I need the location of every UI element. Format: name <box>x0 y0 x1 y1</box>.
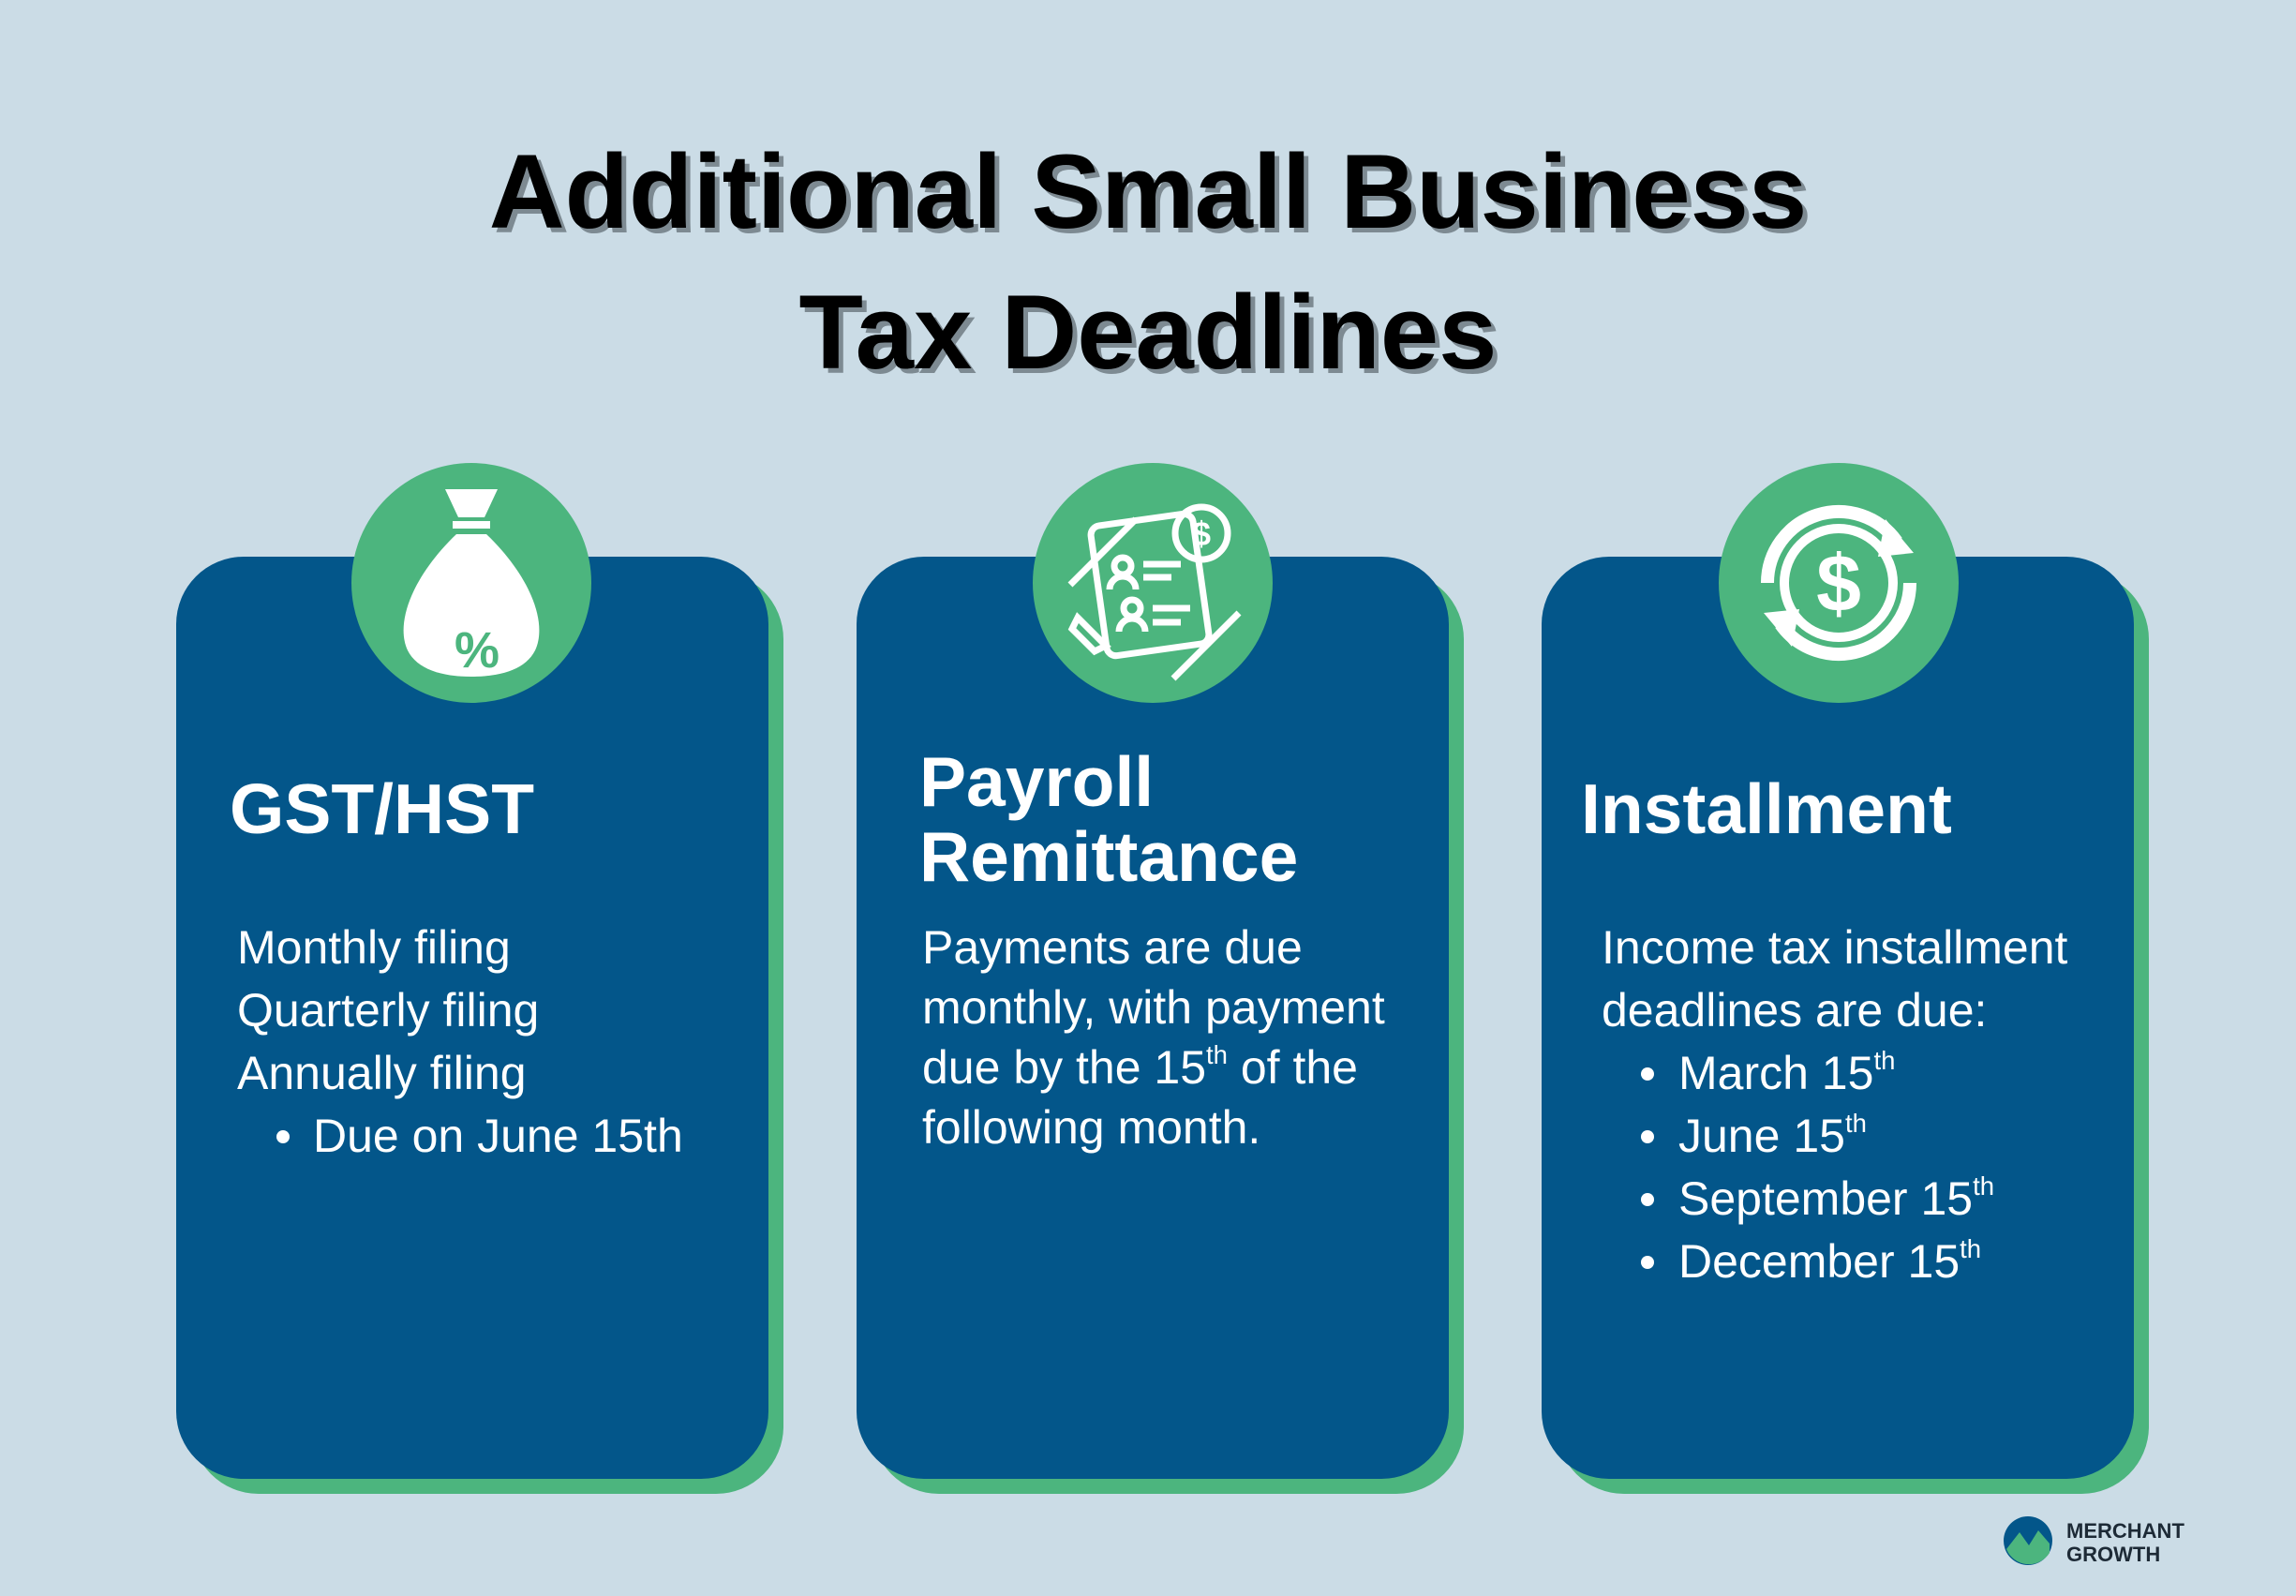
text: Installment body: deadlines are due: <box>1602 984 1987 1037</box>
text: Payroll body <box>922 921 1385 1154</box>
heading: Payroll Remittance <box>919 742 1298 896</box>
logo: Merchant Growth: GROWTH <box>2066 1543 2160 1566</box>
icon: circular dollar: $ <box>1816 539 1861 629</box>
text: GST/HST body: Monthly filing <box>237 921 511 974</box>
icon: payroll document: $ <box>1192 515 1211 553</box>
text: Installment body: Income tax installment <box>1602 921 2067 974</box>
text: Installment body <box>1602 921 2067 1288</box>
text: Installment body: September 15th <box>1678 1171 1994 1225</box>
icon: money bag: % <box>455 622 499 679</box>
text: Payroll body: following month. <box>922 1101 1260 1154</box>
title <box>489 133 1808 391</box>
text: Installment body: June 15th <box>1678 1109 1867 1162</box>
text: GST/HST body: Due on June 15th <box>313 1110 683 1162</box>
text: GST/HST body: Annually filing <box>237 1047 527 1099</box>
logo: Merchant Growth: MERCHANT <box>2066 1519 2184 1543</box>
text: Installment body: March 15th <box>1678 1046 1895 1099</box>
heading: Payroll Remittance: Remittance <box>919 817 1298 896</box>
heading: Payroll Remittance: Payroll <box>919 742 1154 821</box>
icon: circular dollar <box>1719 463 1959 703</box>
text: GST/HST body <box>237 921 683 1162</box>
logo: Merchant Growth <box>2004 1516 2184 1566</box>
panel: GST/HST <box>176 557 783 1494</box>
heading: GST/HST: GST/HST <box>230 769 534 848</box>
icon: money bag <box>351 463 591 703</box>
text: GST/HST body: Quarterly filing <box>237 984 539 1037</box>
text: Installment body: December 15th <box>1678 1234 1981 1288</box>
title: Additional Small Business <box>489 133 1807 250</box>
icon: payroll document <box>1033 463 1273 703</box>
panel: Installment <box>1542 557 2149 1494</box>
text: Payroll body: monthly, with payment <box>922 981 1385 1034</box>
text: Payroll body: Payments are due <box>922 921 1303 974</box>
text: Payroll body: due by the 15th of the <box>922 1040 1358 1094</box>
heading: Installment: Installment <box>1581 769 1952 848</box>
panel: Payroll <box>857 557 1464 1494</box>
title: Tax Deadlines <box>799 274 1497 391</box>
